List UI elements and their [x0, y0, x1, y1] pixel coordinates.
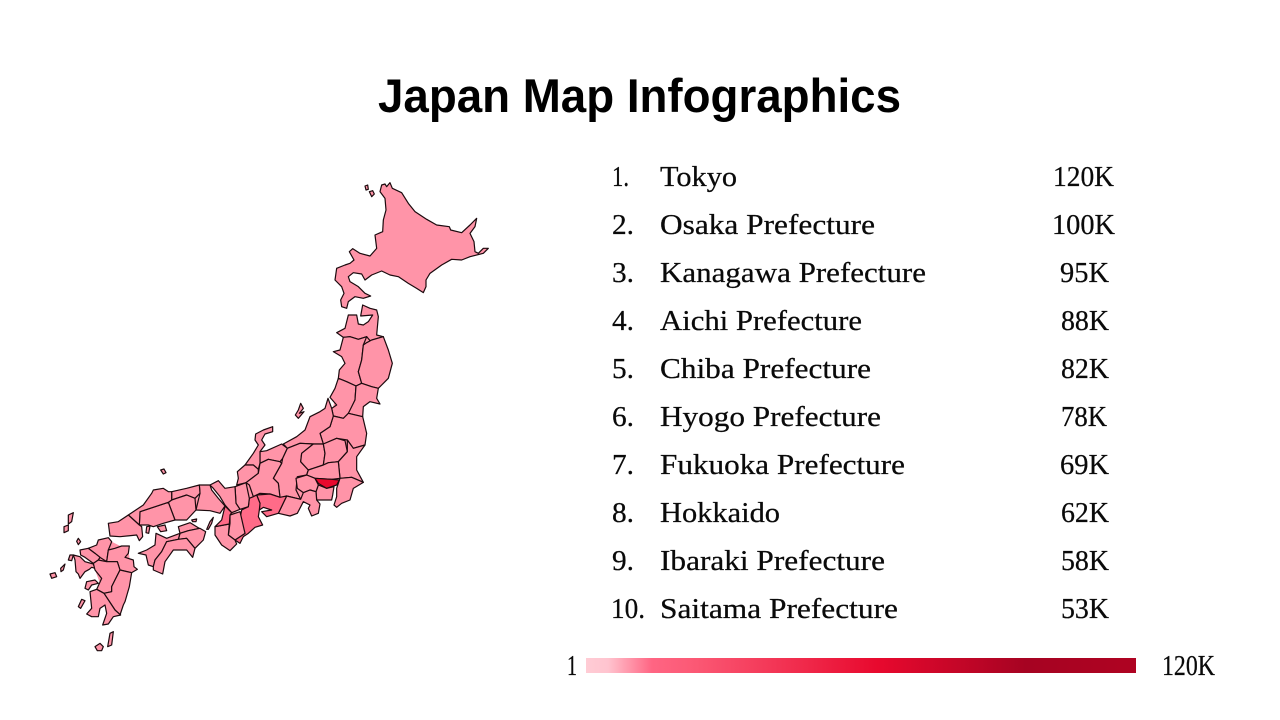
highlight: Aichi	[257, 494, 287, 517]
row 4	[612, 305, 1109, 337]
row 9	[612, 545, 1109, 577]
row 10: 10.	[611, 593, 645, 625]
row 6: 6.	[612, 401, 634, 433]
row 8	[612, 497, 1109, 529]
row 1	[612, 161, 1114, 193]
row 1: 120K	[1053, 161, 1114, 193]
row 3: 3.	[612, 257, 634, 289]
region: Kansai	[210, 481, 249, 551]
row 6: 78K	[1061, 401, 1107, 433]
row 4: Aichi Prefecture	[660, 305, 862, 337]
row 4: 88K	[1061, 305, 1109, 337]
row 10: 53K	[1061, 593, 1109, 625]
row 3: 95K	[1060, 257, 1109, 289]
islands	[50, 469, 213, 651]
row 10: Saitama Prefecture	[660, 593, 898, 625]
row 9: 9.	[612, 545, 634, 577]
row 5: 5.	[612, 353, 634, 385]
row 7: 7.	[612, 449, 634, 481]
row 1: Tokyo	[660, 161, 737, 193]
ranking list	[611, 161, 1115, 625]
row 7: 69K	[1060, 449, 1109, 481]
row 9: 58K	[1061, 545, 1109, 577]
region: Chugoku, Shikoku and Kyushu	[50, 469, 225, 651]
highlight: Tokyo	[315, 478, 339, 488]
row 9: Ibaraki Prefecture	[660, 545, 885, 577]
row 1: 1.	[612, 161, 629, 193]
row 2: 2.	[612, 209, 634, 241]
row 5: 82K	[1061, 353, 1109, 385]
row 6	[612, 401, 1107, 433]
title: Japan Map Infographics	[378, 69, 901, 122]
row 7	[612, 449, 1109, 481]
row 2: 100K	[1052, 209, 1115, 241]
row 5: Chiba Prefecture	[660, 353, 871, 385]
region: Hokkaido	[335, 183, 488, 308]
region: Tohoku	[295, 305, 392, 418]
colour scale legend	[567, 650, 1215, 682]
map of Japan	[50, 183, 488, 651]
row 4: 4.	[612, 305, 634, 337]
row 2	[612, 209, 1115, 241]
row 8: Hokkaido	[660, 497, 780, 529]
row 2: Osaka Prefecture	[660, 209, 875, 241]
row 6: Hyogo Prefecture	[660, 401, 881, 433]
region: Chubu and Kanto	[220, 398, 367, 543]
row 7: Fukuoka Prefecture	[660, 449, 905, 481]
row 8: 8.	[612, 497, 634, 529]
legend maximum label: 120K	[1162, 650, 1215, 682]
highlight: Mie	[235, 495, 263, 543]
row 10	[611, 593, 1109, 625]
row 3	[612, 257, 1109, 289]
row 8: 62K	[1061, 497, 1109, 529]
legend minimum label: 1	[567, 650, 577, 682]
row 5	[612, 353, 1109, 385]
row 3: Kanagawa Prefecture	[660, 257, 926, 289]
legend gradient bar	[586, 658, 1136, 673]
